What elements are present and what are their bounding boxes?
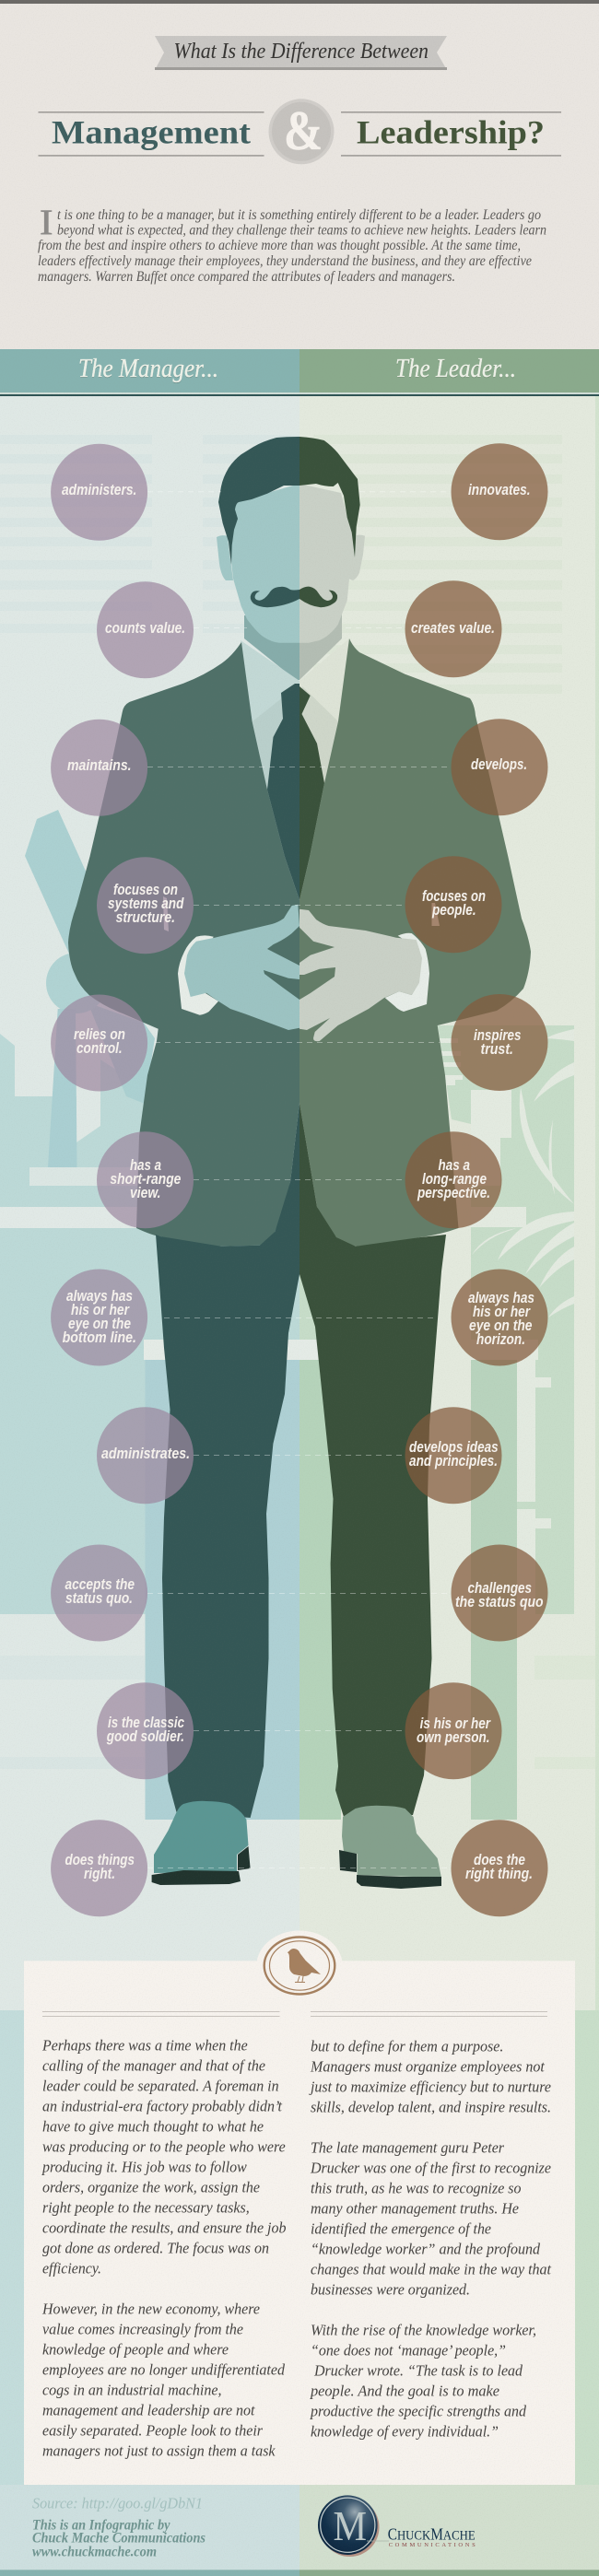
background: palm and building, leader side <box>300 1025 574 1820</box>
article column two: people. And the goal is to make <box>310 2382 499 2399</box>
leader attributes text: always has <box>468 1290 534 1306</box>
source and credit text: www.chuckmache.com <box>32 2544 157 2559</box>
article column two: The late management guru Peter <box>311 2138 505 2156</box>
article column two: changes that would make in the way that <box>311 2260 551 2277</box>
article column two: just to maximize efficiency but to nurture <box>309 2078 551 2095</box>
article column one: Perhaps there was a time when the <box>41 2036 248 2054</box>
leader attributes text: long-range <box>422 1171 487 1188</box>
source and credit text: This is an Infographic by <box>32 2518 170 2534</box>
man: shirt cuffs <box>178 933 429 1015</box>
article column two: knowledge of every individual.” <box>311 2422 499 2440</box>
top bar <box>0 0 599 4</box>
manager attributes text: structure. <box>116 909 175 926</box>
manager attributes text: focuses on <box>113 882 178 898</box>
manager attributes text: control. <box>76 1040 123 1057</box>
leader attributes text: trust. <box>481 1041 513 1058</box>
man: hand, leader side <box>300 909 422 1041</box>
manager attributes text: right. <box>84 1866 115 1882</box>
leader attributes text: people. <box>431 902 476 919</box>
manager attributes text: administrates. <box>101 1446 190 1462</box>
manager attributes text: relies on <box>74 1026 125 1043</box>
article column one <box>41 2036 286 2459</box>
ampersand medallion <box>269 99 334 164</box>
article column one: cogs in an industrial machine, <box>42 2381 221 2398</box>
article column two: “one does not ‘manage’ people,” <box>311 2341 506 2359</box>
header underline <box>0 392 599 396</box>
faint horizontal stripes, top <box>0 435 300 1769</box>
man: right shoe <box>339 1806 441 1889</box>
logo: Chuck Mache Communications: CHUCKMACHE <box>388 2525 476 2544</box>
column header: the manager <box>0 349 300 392</box>
manager attributes text: systems and <box>108 896 184 912</box>
man: necktie <box>267 684 324 900</box>
introduction paragraph <box>38 203 546 285</box>
column header: the leader <box>300 349 599 392</box>
introduction paragraph: from the best and inspire others to achieve more than was thought possible. At the same time, <box>38 238 521 253</box>
leader attributes text: perspective. <box>417 1185 490 1201</box>
article column one: management and leadership are not <box>42 2401 255 2418</box>
leader attributes text: is his or her <box>420 1715 491 1732</box>
manager attributes text: has a <box>130 1157 161 1174</box>
manager attributes text: good soldier. <box>106 1728 184 1745</box>
manager attributes text: eye on the <box>68 1316 131 1332</box>
article column two: but to define for them a purpose. <box>311 2037 503 2055</box>
article column two: businesses were organized. <box>311 2280 470 2298</box>
leader bubbles <box>405 443 547 1916</box>
column header: the manager: The Manager... <box>78 356 218 384</box>
manager attributes text: is the classic <box>108 1715 184 1731</box>
manager bubbles <box>51 444 194 1916</box>
article column two <box>309 2037 551 2440</box>
article column one: knowledge of people and where <box>42 2340 229 2358</box>
article column two: productive the specific strengths and <box>310 2402 527 2419</box>
article column one: got done as ordered. The focus was on <box>42 2239 269 2256</box>
manager attributes text: his or her <box>71 1302 130 1318</box>
leader attributes text: does the <box>474 1852 525 1868</box>
manager attributes text: always has <box>66 1288 133 1305</box>
logo: Chuck Mache Communications <box>318 2495 476 2557</box>
manager attributes text: maintains. <box>67 757 132 774</box>
man: shirt <box>241 638 349 875</box>
footer bar <box>0 2570 599 2576</box>
leader attributes text: focuses on <box>422 888 486 905</box>
connector dashed lines <box>147 492 452 1868</box>
leader attributes text: develops. <box>471 756 527 773</box>
ampersand medallion: & <box>284 100 323 161</box>
article column one: orders, organize the work, assign the <box>42 2178 260 2195</box>
main title: Management <box>52 114 251 151</box>
manager attributes text: status quo. <box>65 1590 133 1607</box>
leader attributes text: innovates. <box>468 482 531 498</box>
man: neck <box>244 615 342 680</box>
logo: Chuck Mache Communications: COMMUNICATIONS <box>389 2542 476 2548</box>
article column one: employees are no longer undifferentiated <box>42 2360 286 2378</box>
source and credit text: Source: http://goo.gl/gDbN1 <box>32 2495 203 2512</box>
introduction paragraph: leaders effectively manage their employees, they understand the business, and they are effective <box>38 253 532 269</box>
man: jacket, leader side <box>300 638 531 1247</box>
leader attributes text: challenges <box>468 1580 532 1597</box>
article column two: With the rise of the knowledge worker, <box>311 2321 536 2338</box>
man: trousers, leader side <box>300 1103 446 1817</box>
source and credit text <box>32 2495 206 2559</box>
ribbon heading: What Is the Difference Between <box>173 40 429 64</box>
leader attributes text: inspires <box>474 1027 522 1044</box>
article column one: However, in the new economy, where <box>41 2300 260 2317</box>
leader attributes text: and principles. <box>409 1453 498 1469</box>
man: left shoe <box>152 1801 251 1885</box>
man: face and ears <box>217 484 365 643</box>
article column one: calling of the manager and that of the <box>42 2056 265 2074</box>
introduction paragraph: t is one thing to be a manager, but it is something entirely different to be a leader. Leaders go <box>57 207 541 223</box>
source and credit text: Chuck Mache Communications <box>32 2530 206 2546</box>
article column two: Drucker was one of the first to recognize <box>310 2159 551 2176</box>
article column two: Drucker wrote. “The task is to lead <box>313 2361 523 2379</box>
article column one: managers not just to assign them a task <box>42 2441 276 2459</box>
leader attributes text: horizon. <box>476 1331 525 1348</box>
manager attributes text: does things <box>65 1852 135 1868</box>
column header: the leader: The Leader... <box>395 356 516 384</box>
man: hand, manager side <box>184 905 300 1030</box>
main title <box>39 111 561 157</box>
leader attributes text: right thing. <box>465 1866 533 1882</box>
article column two: many other management truths. He <box>311 2199 519 2217</box>
main title: Leadership? <box>357 114 545 151</box>
man: hair <box>218 437 360 565</box>
manager attributes text: accepts the <box>65 1576 135 1593</box>
leader attributes text: own person. <box>417 1729 490 1746</box>
article column two: Managers must organize employees not <box>310 2057 545 2075</box>
article column one: coordinate the results, and ensure the job <box>42 2219 286 2236</box>
icon: bird badge <box>264 1937 335 1994</box>
introduction paragraph: I <box>40 203 53 242</box>
manager attributes text: short-range <box>110 1171 181 1188</box>
footer background <box>0 2485 599 2570</box>
manager attributes text: counts value. <box>105 620 185 637</box>
article column one: value comes increasingly from the <box>42 2320 243 2337</box>
article column two: this truth, as he was to recognize so <box>311 2179 522 2196</box>
manager attributes text: view. <box>130 1185 160 1201</box>
leader attributes text: has a <box>439 1157 470 1174</box>
article column one: producing it. His job was to follow <box>41 2158 247 2175</box>
logo: Chuck Mache Communications: M <box>334 2502 367 2549</box>
leader attributes text <box>409 482 544 1882</box>
article column one: leader could be separated. A foreman in <box>42 2077 279 2094</box>
article column one: an industrial-era factory probably didn’t <box>42 2097 282 2114</box>
leader attributes text: the status quo <box>455 1594 544 1610</box>
leader attributes text: develops ideas <box>409 1439 499 1456</box>
man: moustache <box>251 587 337 607</box>
text panel background <box>24 1931 575 2485</box>
man: jacket, manager side <box>68 642 300 1247</box>
article column one: have to give much thought to what he <box>42 2117 264 2135</box>
article column two: “knowledge worker” and the profound <box>311 2240 541 2257</box>
article column one: right people to the necessary tasks, <box>42 2198 250 2216</box>
article column one: easily separated. People look to their <box>42 2421 264 2439</box>
man: trousers, manager side <box>156 1103 300 1818</box>
introduction paragraph: managers. Warren Buffet once compared the attributes of leaders and managers. <box>38 269 455 285</box>
leader attributes text: eye on the <box>469 1317 533 1334</box>
leader attributes text: his or her <box>473 1304 531 1320</box>
manager attributes text: administers. <box>62 482 136 498</box>
ribbon heading <box>155 36 447 70</box>
column header: the leader: The Leader... <box>395 355 516 383</box>
manager attributes text: bottom line. <box>63 1329 136 1346</box>
article column one: was producing or to the people who were <box>42 2137 286 2155</box>
background: city silhouette, manager side <box>0 810 300 1820</box>
leader attributes text: creates value. <box>411 620 495 637</box>
article column one: efficiency. <box>42 2259 101 2277</box>
faint horizontal stripes, right <box>313 435 595 1769</box>
double rules above article <box>42 2011 547 2017</box>
article column two: identified the emergence of the <box>311 2219 491 2237</box>
bubble slivers <box>163 896 440 931</box>
column header: the manager: The Manager... <box>78 355 218 383</box>
introduction paragraph: beyond what is expected, and they challenge their teams to achieve new heights. Leaders learn <box>57 223 546 238</box>
article column two: skills, develop talent, and inspire results. <box>311 2098 551 2115</box>
manager attributes text <box>62 482 190 1882</box>
